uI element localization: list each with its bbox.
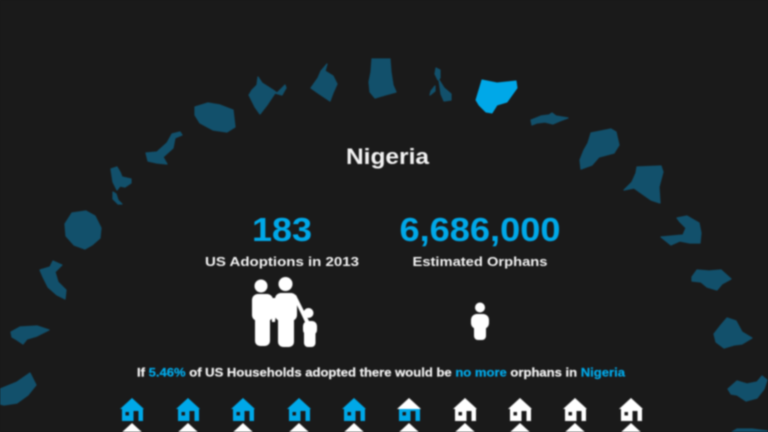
stat: estimated orphans (400, 211, 560, 269)
country: South Africa (0, 373, 36, 405)
house 6 partly blue (397, 398, 421, 421)
house 5 blue (342, 398, 366, 421)
house 7 white (453, 398, 477, 421)
house 4 blue (287, 398, 311, 421)
country: bottom edge partial (732, 429, 768, 432)
country: Ethiopia (714, 318, 752, 348)
house grid (120, 398, 643, 432)
house 10 white (619, 398, 643, 421)
country: Haiti (661, 216, 701, 245)
country: Philippines (430, 68, 451, 101)
house 3 blue (231, 398, 255, 421)
country: DR Congo (624, 166, 663, 203)
country: hexagonal blob (65, 211, 101, 249)
stat: US adoptions (205, 211, 359, 269)
house 9 white (563, 398, 587, 421)
country: Pakistan (146, 132, 182, 164)
country: Uganda (580, 129, 619, 169)
country: China (728, 376, 767, 401)
house 8 white (508, 398, 532, 421)
sentence: If 5.46% of US Households adopted there would be no more orphans in Nigeria (137, 368, 626, 380)
label: orphans: Estimated Orphans (412, 254, 548, 269)
icon: single orphan (471, 302, 489, 340)
country: India (249, 77, 286, 114)
label: adoptions: US Adoptions in 2013 (205, 254, 359, 269)
icon: adoptive family (252, 277, 317, 347)
title: Nigeria (346, 144, 430, 169)
country: Nigeria (highlighted) (476, 80, 517, 113)
country: Ghana (369, 59, 396, 98)
country: Colombia (311, 64, 337, 101)
house 1 blue (120, 398, 144, 421)
country: Honduras (11, 326, 49, 344)
number: orphans: 6,686,000 (400, 211, 560, 248)
country: Poland (195, 103, 235, 132)
house row 2: white roofs, cropped (120, 423, 643, 432)
country: Cuba (531, 113, 568, 125)
country: Peru (40, 261, 66, 299)
country: Ukraine (692, 270, 731, 290)
house 2 blue (176, 398, 200, 421)
country: Thailand (111, 167, 131, 204)
house row 1: filled and unfilled (120, 398, 643, 421)
number: adoptions: 183 (252, 211, 312, 248)
